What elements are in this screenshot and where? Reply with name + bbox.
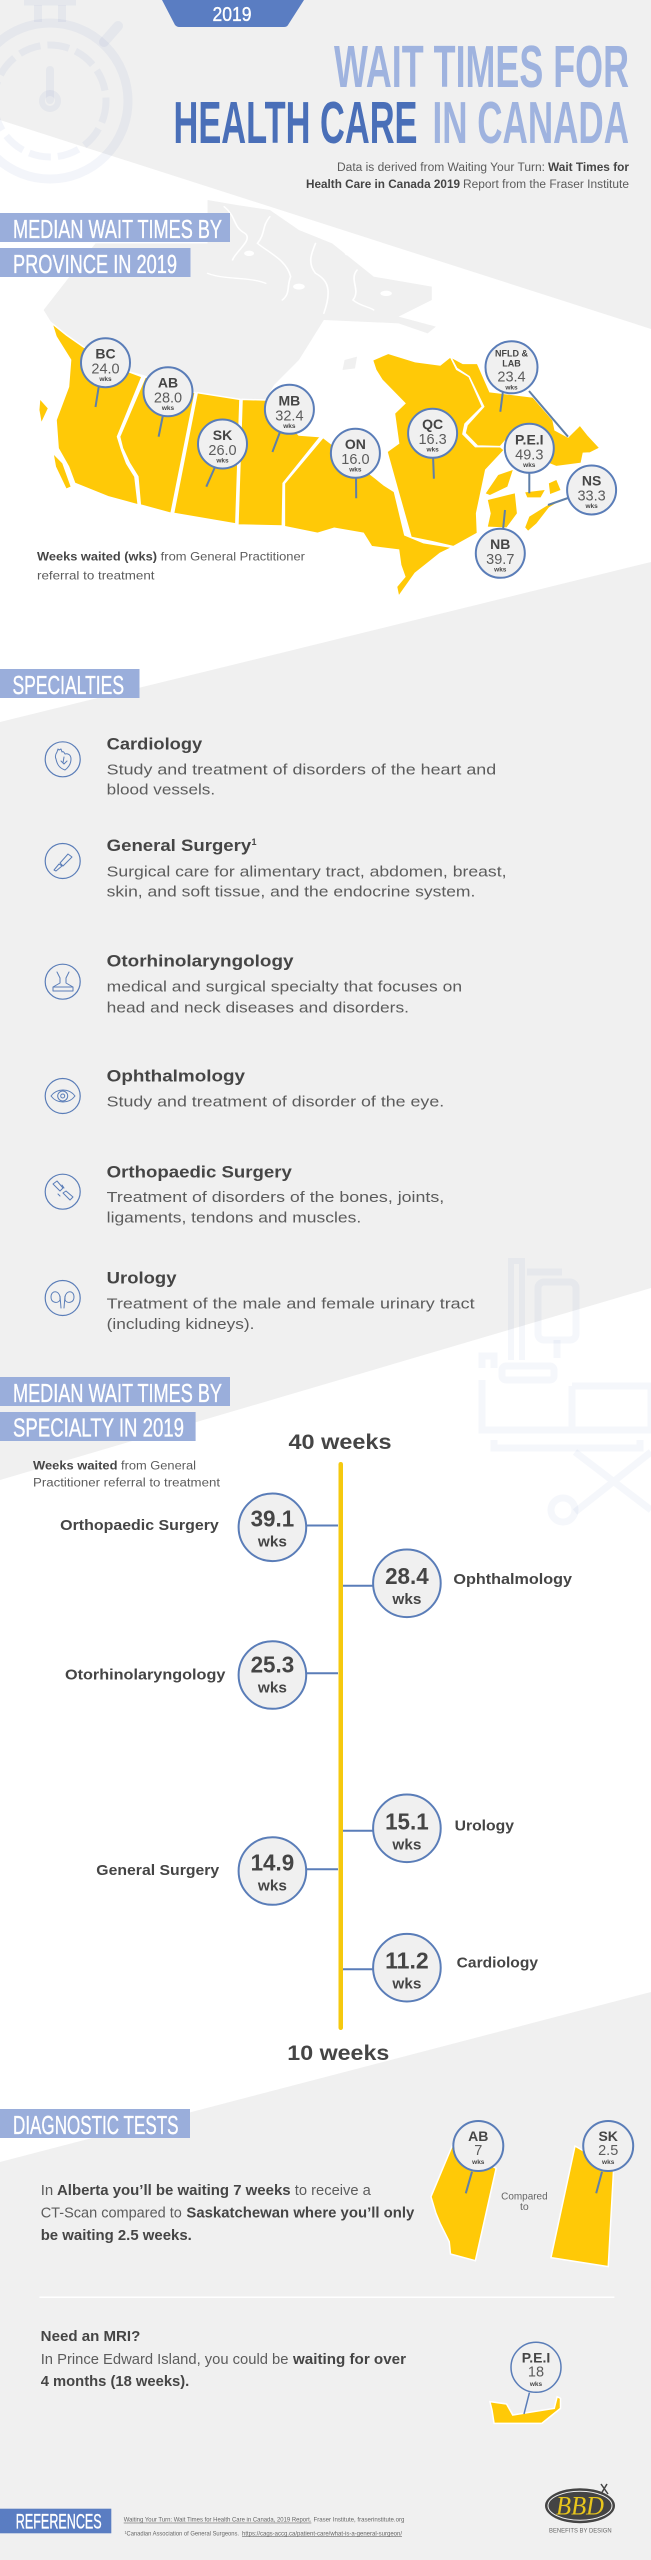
specialty: ophthalmology: Study and treatment of disorder of the eye. (107, 1093, 444, 1110)
icon: Alberta callout (431, 2121, 503, 2261)
callout: SK: 26.0 (208, 443, 237, 459)
callout: AB: wks (161, 405, 175, 412)
callout: NB: wks (493, 566, 507, 574)
callout: SK: SK (213, 427, 232, 443)
callout: NS: 33.3 (577, 488, 606, 504)
callout: QC: QC (422, 416, 443, 432)
map: northern territories in grey (44, 200, 436, 400)
heading: references: REFERENCES (16, 2510, 102, 2533)
icon: Alberta callout: 7 (474, 2143, 482, 2159)
heading: median wait times by province: MEDIAN WAIT TIMES BY (13, 214, 222, 244)
callout: AB: 28.0 (154, 390, 182, 406)
map legend note: referral to treatment (37, 568, 155, 582)
subtitle text block: Wait Times for (548, 162, 630, 174)
map legend note: Weeks waited (wks) (37, 550, 157, 564)
axis label: 40 weeks: 40 weeks (288, 1431, 392, 1454)
callout: NFLD and LAB (486, 341, 538, 393)
references text: https://cags-accg.ca/patient-care/what-is-a-general-surgeon/ (242, 2531, 402, 2537)
text block: CT-scan comparison: In (41, 2182, 53, 2199)
heading: diagnostic tests: DIAGNOSTIC TESTS (13, 2110, 178, 2140)
data point: otorhinolaryngology (65, 1641, 338, 1709)
text block: MRI (41, 2328, 406, 2390)
data point: ophthalmology: wks (391, 1591, 421, 1608)
callout: ON: wks (348, 466, 362, 474)
callout: NFLD and LAB: 23.4 (497, 370, 526, 386)
map callout pins (96, 385, 568, 530)
map: provinces of Canada (39, 323, 600, 597)
data point: cardiology (343, 1934, 539, 2001)
data point: urology: Urology (455, 1818, 515, 1835)
icon: PEI callout: 18 (528, 2365, 544, 2381)
callout: MB: MB (279, 392, 300, 408)
chart note: from General (121, 1460, 196, 1472)
timeline chart (60, 1431, 573, 2065)
specialty: otorhinolaryngology: Otorhinolaryngology (107, 952, 294, 971)
callout: NS (567, 466, 616, 514)
heading: specialties: SPECIALTIES (12, 670, 124, 700)
icon: heart (45, 742, 80, 777)
callout: P.E.I: P.E.I (515, 432, 544, 448)
references text: ¹Canadian Association of General Surgeons. (125, 2531, 239, 2537)
text: compared to (501, 2190, 548, 2213)
data point: orthopaedic surgery: 39.1 (251, 1506, 294, 1532)
callout: NS: wks (584, 503, 598, 510)
text block: CT-scan comparison (41, 2182, 415, 2244)
specialty: urology (45, 1269, 476, 1333)
heading: median wait times by specialty: SPECIALTY IN 2019 (13, 1412, 184, 1442)
callout: BC: wks (98, 376, 112, 383)
text block: MRI: In Prince Edward Island, you could be (41, 2351, 289, 2368)
data point: general surgery: General Surgery (96, 1862, 220, 1879)
heading: median wait times by specialty (0, 1377, 230, 1442)
data point: cardiology: 11.2 (385, 1947, 429, 1973)
icon: PEI callout: P.E.I (522, 2349, 550, 2365)
data point: orthopaedic surgery: Orthopaedic Surgery (60, 1517, 219, 1534)
specialty: general surgery (45, 836, 506, 901)
data point: general surgery: wks (257, 1878, 287, 1895)
data point: urology: wks (391, 1836, 421, 1853)
text: compared to: Compared (501, 2190, 548, 2202)
specialty: general surgery: Surgical care for alimentary tract, abdomen, breast, (107, 863, 506, 880)
specialty: otorhinolaryngology (45, 952, 462, 1016)
chart note (33, 1460, 221, 1490)
logo: Benefits By Design (545, 2484, 615, 2534)
data point: otorhinolaryngology: Otorhinolaryngology (65, 1666, 226, 1683)
icon: PEI callout (490, 2342, 561, 2423)
callout: BC: 24.0 (91, 362, 120, 378)
data point: ophthalmology (343, 1550, 573, 1617)
specialty: orthopaedic surgery: Orthopaedic Surgery (107, 1162, 292, 1181)
year tab: 2019 (212, 4, 252, 26)
logo: Benefits By Design: BENEFITS BY DESIGN (549, 2527, 612, 2534)
data point: orthopaedic surgery (60, 1494, 338, 1561)
callout: MB (265, 385, 314, 434)
logo: Benefits By Design: BBD (556, 2492, 604, 2520)
map legend note: from General Practitioner (161, 550, 305, 564)
references text (124, 2518, 404, 2537)
callout: NS: NS (582, 472, 601, 488)
text block: CT-scan comparison: Saskatchewan where you’ll only (186, 2205, 415, 2222)
callout: SK (198, 420, 247, 468)
heading: median wait times by specialty: MEDIAN WAIT TIMES BY (13, 1378, 222, 1408)
data point: ophthalmology: 28.4 (385, 1563, 429, 1589)
subtitle text block: Health Care in Canada 2019 (306, 179, 460, 191)
callout: QC: wks (425, 446, 439, 454)
chart note: Practitioner referral to treatment (33, 1478, 221, 1490)
callout: MB: 32.4 (275, 408, 304, 424)
title (174, 34, 629, 156)
callout: NFLD and LAB: LAB (502, 359, 521, 369)
data point: general surgery: 14.9 (251, 1850, 294, 1876)
callout: P.E.I: wks (522, 462, 536, 469)
callout: P.E.I (505, 424, 554, 473)
references text: Fraser Institute, fraserinstitute.org (314, 2518, 404, 2524)
callout: QC (408, 409, 457, 458)
specialty: ophthalmology (45, 1067, 444, 1114)
callout: ON: 16.0 (341, 452, 370, 468)
icon: scalpel (45, 844, 80, 878)
icon: kidneys (45, 1280, 80, 1316)
year tab (162, 0, 304, 27)
heading: diagnostic tests (0, 2109, 190, 2140)
subtitle text block: Data is derived from Waiting Your Turn: (337, 162, 545, 174)
heading: median wait times by province (0, 213, 230, 279)
specialty: general surgery: 1 (252, 837, 257, 847)
text block: CT-scan comparison: be waiting 2.5 weeks. (41, 2227, 192, 2244)
icon: stopwatch watermark (0, 2, 128, 179)
data point: cardiology: Cardiology (457, 1955, 539, 1972)
specialty: urology: (including kidneys). (107, 1316, 254, 1333)
text block: MRI: 4 months (18 weeks). (41, 2373, 189, 2390)
text block: CT-scan comparison: CT-Scan compared to (41, 2205, 182, 2222)
callout: SK: wks (215, 458, 229, 464)
icon: hospital bed and IV watermark (482, 1261, 651, 1522)
subtitle text block (306, 162, 630, 191)
axis label: 10 weeks: 10 weeks (287, 2042, 389, 2065)
axis line (338, 1462, 343, 2030)
callout: NFLD and LAB: wks (504, 384, 518, 391)
specialty: general surgery: General Surgery (107, 836, 252, 855)
title: HEALTH CARE (174, 90, 418, 156)
callout: ON: ON (345, 436, 366, 452)
chart note: Weeks waited (33, 1460, 118, 1472)
specialty: otorhinolaryngology: head and neck diseases and disorders. (107, 999, 409, 1016)
callout: MB: wks (282, 423, 296, 430)
specialty: cardiology: blood vessels. (107, 782, 215, 799)
specialty: ophthalmology: Ophthalmology (107, 1067, 246, 1086)
data point: urology (343, 1794, 515, 1862)
specialty: cardiology: Study and treatment of disorders of the heart and (107, 761, 496, 778)
data point: cardiology: wks (391, 1975, 421, 1992)
data point: ophthalmology: Ophthalmology (453, 1571, 573, 1588)
icon: Alberta callout: wks (471, 2159, 485, 2166)
specialty: orthopaedic surgery (45, 1162, 444, 1226)
callout: QC: 16.3 (418, 432, 447, 448)
callout: BC (81, 338, 130, 387)
specialty: general surgery: skin, and soft tissue, and the endocrine system. (107, 884, 475, 901)
specialty: otorhinolaryngology: medical and surgical specialty that focuses on (107, 979, 462, 996)
map legend note (37, 550, 305, 582)
references text: Waiting Your Turn: Wait Times for Health Care in Canada, 2019 Report. (124, 2518, 312, 2524)
text block: MRI: waiting for over (292, 2351, 406, 2368)
icon: throat (45, 964, 80, 999)
specialty: urology: Treatment of the male and female urinary tract (107, 1296, 476, 1313)
callout: NB: 39.7 (486, 552, 514, 568)
callout: NFLD and LAB: NFLD & (495, 349, 528, 359)
text block: CT-scan comparison: to receive a (295, 2182, 371, 2199)
specialty: orthopaedic surgery: ligaments, tendons and muscles. (107, 1209, 361, 1226)
icon: broken bone (45, 1174, 80, 1209)
specialty: orthopaedic surgery: Treatment of disorders of the bones, joints, (107, 1189, 444, 1206)
heading: median wait times by province: PROVINCE IN 2019 (13, 249, 177, 279)
data point: otorhinolaryngology: 25.3 (251, 1652, 294, 1678)
callout: AB: AB (158, 374, 178, 390)
data point: orthopaedic surgery: wks (257, 1534, 287, 1551)
data point: otorhinolaryngology: wks (257, 1679, 287, 1696)
specialty: urology: Urology (107, 1269, 177, 1288)
specialty: cardiology (45, 734, 496, 799)
callout: P.E.I: 49.3 (515, 448, 543, 464)
icon: PEI callout: wks (529, 2381, 543, 2388)
icon: Saskatchewan callout: SK (598, 2128, 618, 2144)
icon: Alberta callout: AB (468, 2128, 488, 2144)
subtitle text block: Report from the Fraser Institute (463, 179, 629, 191)
text: compared to: to (520, 2201, 529, 2213)
callout: AB (144, 367, 192, 416)
text block: MRI: Need an MRI? (41, 2328, 140, 2345)
heading: specialties (0, 669, 140, 700)
callout: BC: BC (95, 346, 116, 362)
icon: eye (45, 1078, 80, 1114)
heading: references (0, 2509, 111, 2533)
text block: CT-scan comparison: Alberta you’ll be waiting 7 weeks (57, 2182, 291, 2199)
data point: urology: 15.1 (385, 1808, 429, 1834)
icon: Saskatchewan callout (551, 2121, 633, 2267)
callout: ON (331, 429, 380, 478)
callout: NB: NB (490, 536, 510, 552)
callout: NB (476, 529, 525, 578)
specialty: cardiology: Cardiology (107, 734, 203, 753)
data point: general surgery (96, 1837, 338, 1905)
icon: Saskatchewan callout: 2.5 (598, 2143, 618, 2159)
icon: Saskatchewan callout: wks (601, 2159, 615, 2166)
